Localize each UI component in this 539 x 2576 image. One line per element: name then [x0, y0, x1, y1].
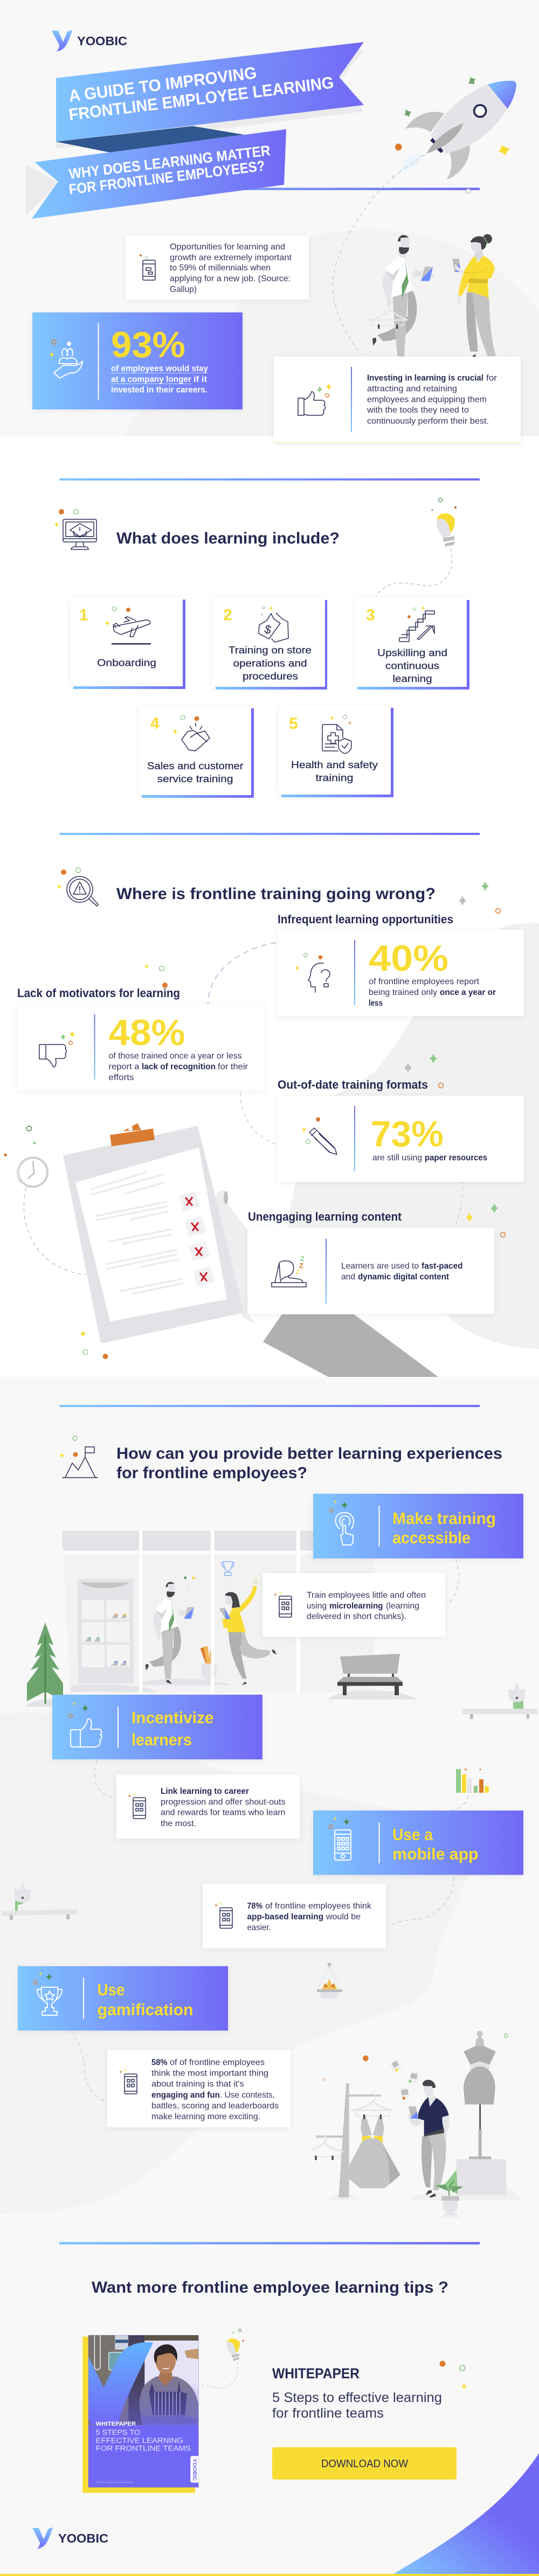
- card: upskilling: [355, 597, 469, 690]
- title banner: FRONTLINE EMPLOYEE LEARNING: [68, 73, 335, 124]
- text card: opportunities: to 59% of millennials when: [170, 263, 271, 273]
- icon: document with shield: [322, 715, 351, 754]
- callout: use a mobile app: [313, 1811, 523, 1875]
- whitepaper cover: [82, 2335, 198, 2493]
- icon: small bar chart: [456, 1769, 489, 1793]
- callout: use gamification: [18, 1966, 228, 2031]
- bottom bar: [0, 2574, 539, 2576]
- text card: microlearning: Train employees little and often: [307, 1591, 426, 1600]
- section rule: [59, 833, 480, 835]
- stat card: 40%: once a year or: [440, 988, 496, 997]
- card: upskilling: 3: [366, 607, 375, 624]
- heading: out-of-date formats: [278, 1054, 443, 1091]
- heading: infrequent opportunities: Infrequent learning opportunities: [278, 913, 453, 926]
- icon: price tags: [259, 606, 288, 642]
- callout: use gamification: gamification: [97, 2000, 193, 2019]
- stat card: 73%: paper resources: [425, 1153, 487, 1162]
- stat card: 40%: less: [369, 999, 383, 1008]
- icon: handshake: [172, 715, 210, 751]
- callout: incentivize learners: [52, 1695, 262, 1759]
- card: store operations: [212, 597, 327, 690]
- stat card: 48%: [17, 1004, 264, 1090]
- icon: thumbs up: [298, 384, 331, 415]
- card: upskilling: Upskilling and: [377, 648, 447, 658]
- text card: investing in learning: continuously perform their best.: [367, 417, 489, 426]
- card: health and safety: Health and safety: [291, 760, 378, 770]
- icon: phone: [120, 2070, 137, 2094]
- card: onboarding: [71, 597, 185, 689]
- illustration: clock: [4, 1126, 47, 1187]
- text card: engaging and fun: 58%: [151, 2058, 167, 2067]
- stat card: 40%: 40%: [369, 938, 448, 979]
- stat card: 93%: at a company longer: [111, 375, 191, 384]
- top section rule: [59, 187, 480, 190]
- stat card: 93%: invested in their careers.: [111, 386, 208, 394]
- heading: out-of-date formats: Out-of-date training formats: [278, 1078, 428, 1091]
- illustration: hand behind clipboard: [205, 1190, 256, 1325]
- illustration: man with phone: [368, 235, 433, 363]
- text card: opportunities: Opportunities for learning and: [170, 242, 285, 252]
- stat card: 48%: lack of recognition: [142, 1062, 216, 1071]
- card: sales training: [139, 706, 254, 798]
- logo top: [52, 30, 127, 52]
- whitepaper cover: YOOBIC | Published October 2021: [96, 2481, 134, 2483]
- text card: unengaging learning: and: [341, 1272, 355, 1282]
- text card: unengaging learning: Learners are used to: [341, 1262, 419, 1271]
- text card: app-based learning: app-based learning: [247, 1912, 323, 1921]
- stat card: 93%: of employees would stay: [111, 364, 208, 373]
- heading: better learning experiences: How can you provide better learning experiences: [116, 1445, 502, 1463]
- man with phone: [408, 2080, 450, 2197]
- bench: [328, 1654, 416, 1700]
- text card: microlearning: [262, 1573, 445, 1637]
- text card: career progression: the most.: [161, 1819, 196, 1828]
- callout: use gamification: Use: [97, 1980, 125, 1999]
- floating cards: [323, 2034, 508, 2100]
- text card: unengaging learning: dynamic digital content: [358, 1272, 450, 1282]
- connector: [95, 1760, 115, 1798]
- card: sales training: 4: [150, 714, 160, 733]
- text card: opportunities: [126, 236, 309, 300]
- icon: stairs with arrow: [399, 606, 434, 642]
- icon: trophy white: [33, 1972, 62, 2015]
- illustration: woman dancing: [219, 1579, 277, 1685]
- stat card: 48%: report a: [109, 1062, 140, 1071]
- download button: DOWNLOAD NOW: [321, 2458, 408, 2470]
- icon: thumbs down: [39, 1032, 75, 1067]
- callout: incentivize learners: Incentivize: [132, 1708, 213, 1727]
- heading: where is training going wrong: Where is frontline training going wrong?: [116, 885, 436, 903]
- icon: price tags: $: [263, 622, 273, 637]
- icon: phone white: [329, 1817, 351, 1860]
- heading: better learning experiences: [116, 1445, 502, 1482]
- whitepaper text block: WHITEPAPER: [272, 2365, 360, 2382]
- card: health and safety: training: [316, 772, 354, 783]
- callout: incentivize learners: learners: [132, 1730, 192, 1749]
- whitepaper cover: YOOBIC: [191, 2459, 197, 2481]
- whitepaper cover: WHITEPAPER: [96, 2421, 136, 2427]
- card: sales training: Sales and customer: [147, 761, 244, 771]
- text card: investing in learning: for: [486, 374, 497, 382]
- title banner: [56, 42, 364, 152]
- icon: hand with people: [50, 340, 82, 378]
- window frames: [139, 1530, 300, 1693]
- title banner: A GUIDE TO IMPROVING: [67, 63, 258, 106]
- text card: microlearning: (learning: [386, 1602, 419, 1611]
- stat card: 48%: of those trained once a year or less: [109, 1052, 241, 1061]
- illustration: boutique scene with man, dress and mannequin: [311, 2031, 521, 2218]
- stat card: 73%: 73%: [371, 1113, 444, 1154]
- text card: engaging and fun: make learning more exciting.: [151, 2112, 260, 2121]
- text card: engaging and fun: battles, scoring and leaderboards: [151, 2101, 279, 2111]
- download button: [272, 2447, 457, 2480]
- icon: phone: [216, 1903, 232, 1928]
- stat card: 93%: if it: [194, 375, 208, 384]
- illustration: man in store: [146, 1582, 194, 1684]
- whitepaper text block: [272, 2361, 467, 2421]
- text card: engaging and fun: think the most important thing: [151, 2069, 268, 2078]
- text card: engaging and fun: [107, 2050, 291, 2127]
- trophy: [222, 1562, 234, 1576]
- logo bottom: [32, 2528, 108, 2549]
- text card: investing in learning: employees and equipping them: [367, 395, 487, 404]
- text card: investing in learning: [274, 357, 521, 443]
- text card: app-based learning: 78%: [247, 1902, 262, 1911]
- text card: career progression: and rewards for teams who learn: [161, 1808, 286, 1818]
- rocket flight path: [333, 155, 423, 354]
- icon: phone: [129, 1794, 146, 1819]
- section rule: [59, 1405, 480, 1407]
- heading: what does learning include: What does learning include?: [116, 530, 340, 547]
- illustration: woman with phone: [452, 234, 496, 364]
- stat card: 40%: of frontline employees report: [369, 977, 480, 986]
- stat card: 48%: efforts: [109, 1073, 134, 1082]
- dress: [349, 2114, 400, 2188]
- subtitle banner: WHY DOES LEARNING MATTER: [68, 142, 271, 182]
- text card: investing in learning: Investing in learning is crucial: [367, 374, 483, 382]
- heading: lack of motivators: Lack of motivators for learning: [17, 986, 180, 1000]
- text card: unengaging learning: fast-paced: [421, 1262, 462, 1271]
- shelf with plant, left: [2, 1882, 77, 1920]
- potted plant: [435, 2170, 464, 2218]
- icon: fingerprint touch: [330, 1500, 354, 1545]
- check boxes: [179, 1191, 215, 1287]
- store front illustration: [62, 1530, 374, 1693]
- subtitle banner: FOR FRONTLINE EMPLOYEES?: [68, 158, 266, 198]
- icon: sleeping learner: [272, 1255, 306, 1287]
- icon: head with question mark: [294, 953, 330, 992]
- subtitle banner: [26, 129, 286, 219]
- small bulb with trail: [199, 2329, 244, 2389]
- card: health and safety: 5: [289, 715, 298, 733]
- card: store operations: procedures: [243, 671, 298, 682]
- icon: monitor with graduation cap: [54, 509, 96, 549]
- icon: thumbs up white: [69, 1702, 102, 1747]
- clothes rack: [311, 2083, 392, 2197]
- callout: use a mobile app: Use a: [392, 1825, 433, 1844]
- text card: app-based learning: of frontline employees think: [265, 1902, 372, 1911]
- connector: [389, 1877, 454, 1926]
- stat card: 73%: are still using: [372, 1153, 422, 1162]
- whitepaper text block: 5 Steps to effective learning: [272, 2390, 442, 2405]
- stat card: 40%: [277, 930, 524, 1016]
- text card: career progression: Link learning to career: [161, 1787, 249, 1796]
- dashed connector ring: [24, 943, 462, 1275]
- text card: engaging and fun: about training is that it's: [151, 2080, 244, 2089]
- text card: career progression: [116, 1774, 300, 1839]
- text card: app-based learning: would be: [326, 1912, 361, 1921]
- card: onboarding: 1: [79, 607, 88, 624]
- section rule: [59, 2242, 480, 2244]
- decorative sparkles near heading: [144, 881, 500, 988]
- rocket: [390, 77, 516, 193]
- shelf with plant, right: [462, 1682, 537, 1719]
- dots below clipboard: [80, 1331, 108, 1359]
- tree: [26, 1623, 63, 1707]
- icon: pencil: [302, 1117, 337, 1154]
- icon: sleeping learner: Z: [300, 1255, 305, 1263]
- shoe display shelf: [77, 1579, 134, 1683]
- text card: opportunities: applying for a new job. (Source:: [170, 274, 291, 283]
- card: store operations: operations and: [233, 658, 307, 669]
- section rule: [59, 478, 480, 481]
- callout: make training accessible: [313, 1494, 523, 1558]
- whitepaper cover: FOR FRONTLINE TEAMS: [96, 2443, 191, 2452]
- text card: unengaging learning: [247, 1228, 494, 1314]
- heading: better learning experiences: for frontline employees?: [116, 1464, 307, 1482]
- text card: engaging and fun: . Use contests,: [220, 2091, 275, 2100]
- callout: make training accessible: Make training: [392, 1509, 496, 1528]
- text card: investing in learning: with the tools they need to: [367, 406, 469, 415]
- hanging plant: [317, 1963, 342, 1999]
- paper lines: [91, 1172, 183, 1294]
- stat card: 48%: 48%: [109, 1012, 185, 1053]
- connector: [447, 1559, 459, 1605]
- icon: sleeping learner: Z: [296, 1269, 299, 1275]
- connector: [71, 2031, 107, 2102]
- icon: magnifier warning: [57, 868, 98, 906]
- sparkles near unengaging card: [466, 1203, 506, 1237]
- heading: unengaging content: Unengaging learning content: [248, 1210, 402, 1223]
- icon: mountain with flag: [59, 1436, 98, 1478]
- small stars: [184, 1576, 195, 1589]
- icon: light bulb with trail: [376, 498, 457, 596]
- text card: opportunities: growth are extremely important: [170, 253, 292, 262]
- heading: more tips: Want more frontline employee learning tips ?: [92, 2279, 448, 2296]
- connector: [452, 1795, 468, 1811]
- icon: sleeping learner: Z: [299, 1262, 303, 1270]
- text card: investing in learning: attracting and retaining: [367, 385, 457, 393]
- text card: app-based learning: [203, 1884, 386, 1948]
- text card: engaging and fun: engaging and fun: [151, 2091, 220, 2100]
- illustration: clipboard with crosses: [63, 1123, 244, 1343]
- card: store operations: 2: [223, 607, 232, 624]
- icon: phone: [275, 1591, 292, 1617]
- text card: microlearning: using: [307, 1602, 327, 1611]
- callout: use a mobile app: mobile app: [392, 1844, 479, 1863]
- whitepaper text block: for frontline teams: [272, 2406, 384, 2421]
- vase with sticks: [201, 1646, 217, 1680]
- photo of smiling worker: [139, 2344, 198, 2425]
- card: upskilling: learning: [392, 673, 432, 684]
- card: onboarding: Onboarding: [97, 657, 156, 668]
- stat card: 73%: [277, 1096, 524, 1182]
- stat card: 93%: 93%: [111, 324, 185, 365]
- text card: microlearning: delivered in short chunks).: [307, 1612, 406, 1621]
- mannequin: [457, 2031, 506, 2195]
- icon: airplane: [105, 607, 151, 644]
- stat card: 93%: [32, 312, 243, 409]
- corner swoosh: [393, 2453, 539, 2574]
- card: upskilling: continuous: [385, 660, 439, 671]
- illustration: arm sleeve: [263, 1314, 438, 1377]
- card: sales training: service training: [157, 774, 233, 784]
- stat card: 40%: being trained only: [369, 988, 437, 997]
- text card: app-based learning: easier.: [247, 1923, 271, 1932]
- card: store operations: Training on store: [229, 645, 312, 656]
- whitepaper cover: EFFECTIVE LEARNING: [96, 2436, 183, 2445]
- logo top: YOOBIC: [77, 34, 127, 48]
- callout: make training accessible: accessible: [392, 1528, 471, 1547]
- text card: opportunities: Gallup): [170, 285, 197, 294]
- text card: career progression: progression and offer shout-outs: [161, 1798, 286, 1807]
- logo bottom: YOOBIC: [58, 2531, 108, 2545]
- stat card: 48%: for their: [218, 1062, 248, 1071]
- card: health and safety: [279, 705, 393, 797]
- photo background: [88, 2335, 198, 2425]
- whitepaper cover: 5 STEPS TO: [96, 2428, 140, 2436]
- text card: engaging and fun: of of frontline employees: [170, 2058, 265, 2067]
- icon: phone chat: [140, 254, 155, 280]
- text card: microlearning: microlearning: [329, 1602, 383, 1611]
